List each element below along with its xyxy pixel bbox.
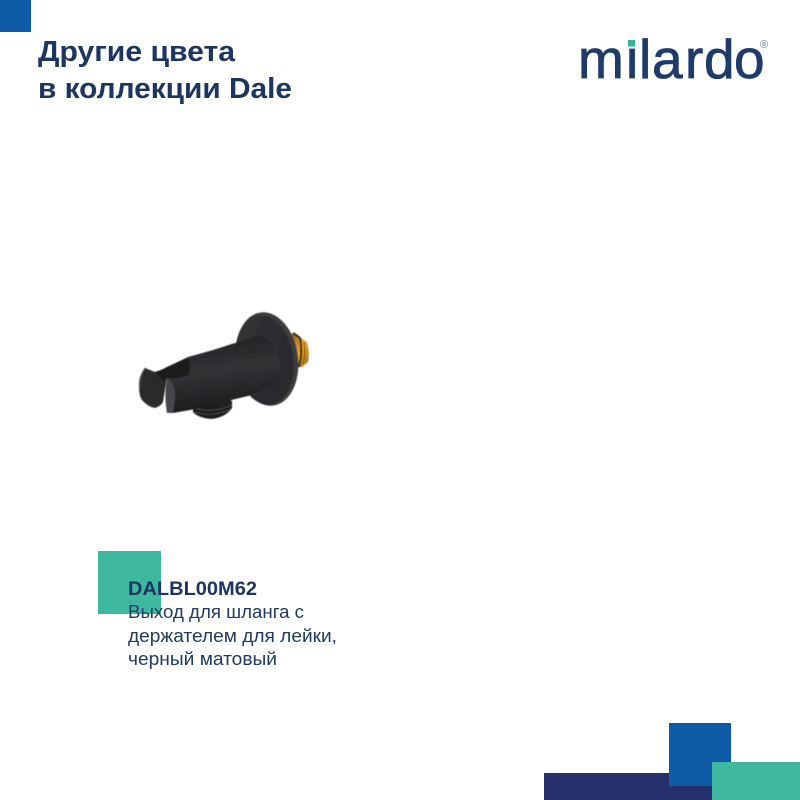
- flange: [230, 308, 304, 410]
- product text block: [128, 579, 337, 669]
- lower nipple: [193, 397, 232, 419]
- holder groove shadow: [155, 358, 190, 382]
- product text block: DALBL00M62: [128, 579, 257, 600]
- holder prong face: [166, 378, 175, 413]
- product text block: Выход для шланга с: [128, 601, 304, 622]
- logo dot cover: [625, 34, 638, 47]
- title: [38, 36, 292, 105]
- teal square behind product text: [98, 551, 161, 614]
- product text block: держателем для лейки,: [128, 625, 337, 646]
- left prong inner edge: [140, 368, 145, 388]
- decorative blocks: bottom right: [544, 723, 800, 800]
- left holder prong: [139, 368, 168, 408]
- cylinder and holder body: [155, 336, 280, 413]
- product text block: черный матовый: [128, 648, 277, 669]
- thread: [290, 333, 309, 368]
- decorative square: top left: [0, 0, 31, 32]
- registered mark: ®: [760, 39, 768, 51]
- logo teal dot: [628, 40, 635, 46]
- title: в коллекции Dale: [38, 73, 292, 105]
- title: Другие цвета: [38, 36, 236, 68]
- logo: milardo: milardo: [578, 28, 765, 90]
- product: black matte hose outlet with holder: [139, 308, 309, 419]
